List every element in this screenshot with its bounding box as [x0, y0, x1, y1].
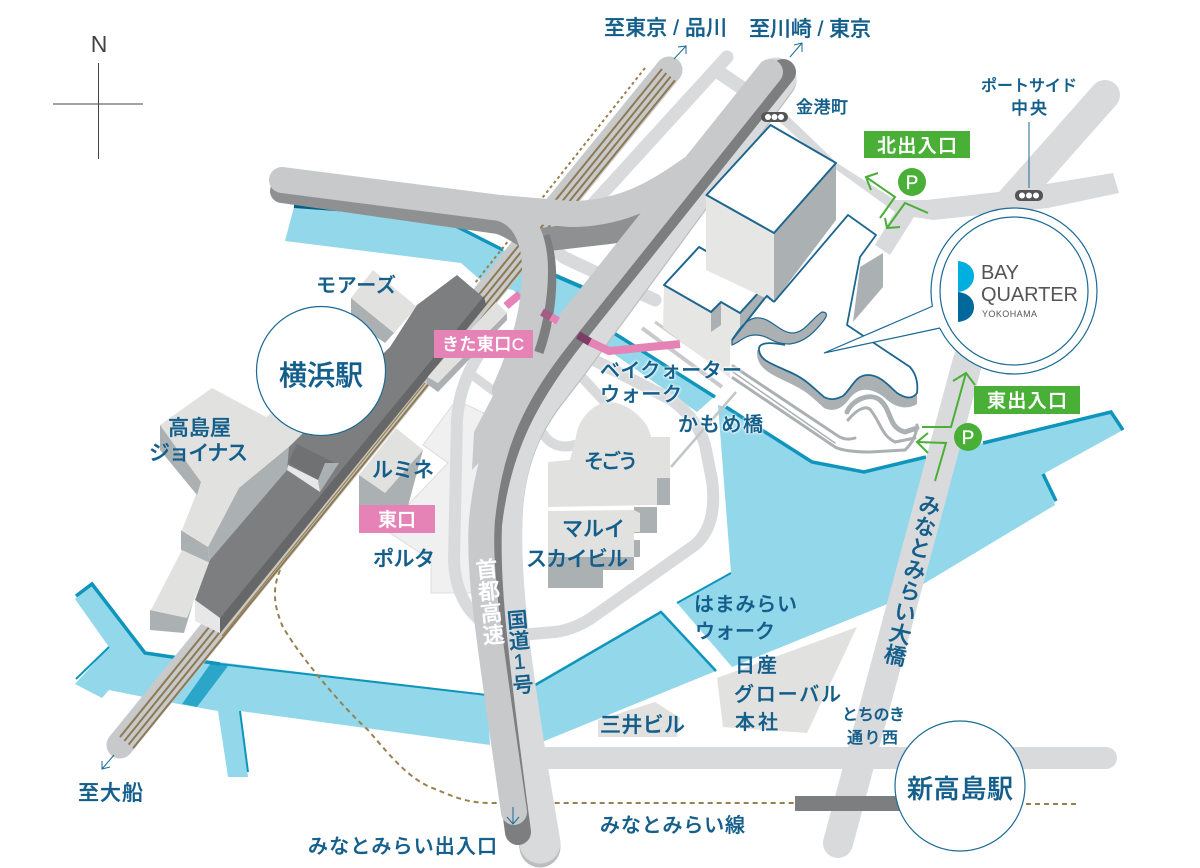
compass north: [53, 31, 143, 159]
place name labels: 日産: [735, 654, 777, 677]
parking icons: P: [962, 428, 974, 449]
Nissan building: [717, 627, 857, 733]
traffic signal: Portside: [1015, 122, 1043, 201]
label: kita-east exit: きた東口C: [442, 335, 524, 354]
road label: National Route 1: 国道1号: [504, 608, 534, 696]
underground mall Porta: [390, 403, 484, 593]
Takashimaya Joinus building: [150, 388, 318, 633]
place name labels: マルイ: [562, 518, 625, 541]
label: east entrance: 東出入口: [987, 390, 1067, 412]
label: east exit: 東口: [378, 509, 416, 531]
place name labels: グローバル: [734, 683, 841, 706]
Yokohama station building: [195, 275, 486, 636]
east concourse block: [427, 302, 507, 392]
place name labels: ウォーク: [695, 620, 775, 643]
compass north: N: [91, 31, 107, 57]
Bay Quarter logo callout: BAY: [981, 262, 1019, 284]
place name labels: スカイビル: [526, 548, 628, 571]
place name labels: 至大船: [78, 782, 143, 805]
label: east entrance: [974, 386, 1080, 414]
road label: Shuto Expressway: 首都高速: [472, 557, 506, 647]
Bay Quarter podium with terraces: [730, 215, 917, 458]
Bay Quarter logo callout: QUARTER: [981, 284, 1078, 306]
pink walkway east part with road crossings: [542, 312, 680, 351]
place name labels: 高島屋: [168, 417, 231, 440]
Shin-Takashima station circle: [895, 721, 1025, 851]
Minatomirai line dotted route: [275, 68, 1080, 804]
place name labels: モアーズ: [316, 274, 396, 297]
water: canals and bay: [75, 206, 1123, 777]
north entrance arrows: [866, 173, 928, 228]
pink walkway west part: [506, 294, 520, 306]
overpass underside shadow: [282, 191, 650, 240]
place name labels: 至川崎 / 東京: [749, 18, 871, 41]
place name labels: 中央: [1011, 99, 1047, 118]
Mitsui building: [598, 702, 685, 737]
place name labels: ポートサイド: [981, 77, 1077, 95]
place name labels: みなとみらい出入口: [308, 835, 497, 858]
parking icons: [898, 168, 982, 451]
traffic signal: Kinko-cho: [761, 112, 788, 122]
Bay Quarter low building: [663, 247, 766, 378]
place name labels: みなとみらい線: [600, 814, 745, 837]
Yokohama station circle: [256, 306, 386, 436]
Yokohama station circle: 横浜駅: [279, 360, 363, 391]
highway and national route 1: [472, 72, 783, 847]
Minatomirai line station bar: [795, 796, 900, 811]
label: north entrance: 北出入口: [877, 135, 957, 157]
Mitsui building: 三井ビル: [600, 714, 685, 737]
railway tracks: [120, 69, 675, 748]
Bay Quarter tower: [706, 125, 836, 302]
label: kita-east exit: [434, 330, 533, 358]
place name labels: かもめ橋: [678, 413, 763, 436]
place name labels: はまみらい: [694, 594, 797, 616]
place name labels: ポルタ: [373, 548, 435, 571]
place name labels: そごう: [584, 450, 638, 473]
direction arrows: [102, 43, 802, 824]
place name labels: ベイクォーター: [600, 359, 742, 382]
minor roads: [454, 57, 1119, 843]
east entrance arrows: [917, 373, 975, 481]
place name labels: 金港町: [796, 98, 848, 117]
place name labels: 通り西: [847, 729, 898, 747]
label: north entrance: [864, 131, 970, 158]
place name labels: ウォーク: [600, 383, 682, 406]
place name labels: ジョイナス: [149, 442, 248, 465]
Bay Quarter logo callout: [824, 208, 1097, 374]
road label: Minatomirai Ohashi: みなとみらい大橋: [879, 491, 943, 669]
place name labels: 至東京 / 品川: [604, 17, 727, 40]
place name labels: 本社: [735, 711, 778, 734]
overpass ramps: [282, 168, 692, 390]
label: east exit: [359, 505, 435, 533]
place name labels: とちのき: [842, 706, 905, 724]
parking icons: P: [906, 173, 918, 194]
Shin-Takashima station circle: 新高島駅: [907, 774, 1013, 804]
Sogo building: [548, 402, 670, 507]
Marui Sky Building: [548, 507, 657, 588]
More's building: [351, 270, 417, 343]
Bay Quarter logo callout: YOKOHAMA: [982, 309, 1037, 319]
place name labels: ルミネ: [372, 459, 434, 482]
Lumine building: [359, 428, 423, 506]
